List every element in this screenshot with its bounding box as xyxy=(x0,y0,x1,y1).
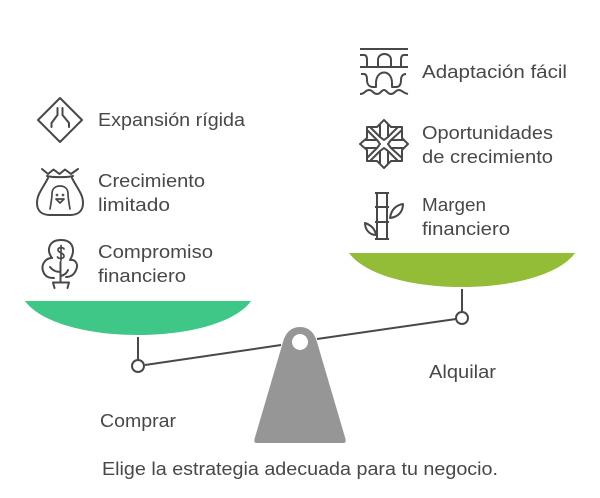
label: Compromiso financiero: Compromiso xyxy=(98,241,213,262)
icon: money tree xyxy=(42,240,77,288)
label: Margen financiero: Margen xyxy=(422,194,486,215)
label: Oportunidades de crecimiento: de crecimiento xyxy=(422,146,553,167)
label: Compromiso financiero xyxy=(98,241,213,286)
fulcrum xyxy=(254,327,346,443)
label: Margen financiero xyxy=(422,194,510,239)
label: Alquilar: Alquilar xyxy=(429,361,496,382)
icon: aqueduct xyxy=(360,49,408,94)
icon: bamboo xyxy=(365,193,403,239)
label: Comprar: Comprar xyxy=(100,410,176,431)
label: Expansión rígida: Expansión rígida xyxy=(98,109,246,130)
label: Crecimiento limitado xyxy=(98,170,205,215)
caption: Elige la estrategia adecuada para tu negocio. xyxy=(102,458,498,479)
label: Crecimiento limitado: limitado xyxy=(98,194,170,215)
label: Oportunidades de crecimiento: Oportunidades xyxy=(422,122,553,143)
label: Crecimiento limitado: Crecimiento xyxy=(98,170,205,191)
label: Compromiso financiero: financiero xyxy=(98,265,186,286)
label: Margen financiero: financiero xyxy=(422,218,510,239)
label: Adaptación fácil: Adaptación fácil xyxy=(422,61,567,82)
right pan hanger xyxy=(456,289,468,324)
icon: money bag with bird xyxy=(37,169,83,215)
icon: road narrowing xyxy=(38,98,82,142)
left pan hanger xyxy=(132,337,144,372)
label: Oportunidades de crecimiento xyxy=(422,122,553,167)
seesaw beam xyxy=(145,319,456,365)
icon: geometric star xyxy=(360,120,408,168)
left pan: green xyxy=(25,301,251,335)
right pan: lime xyxy=(349,253,575,287)
